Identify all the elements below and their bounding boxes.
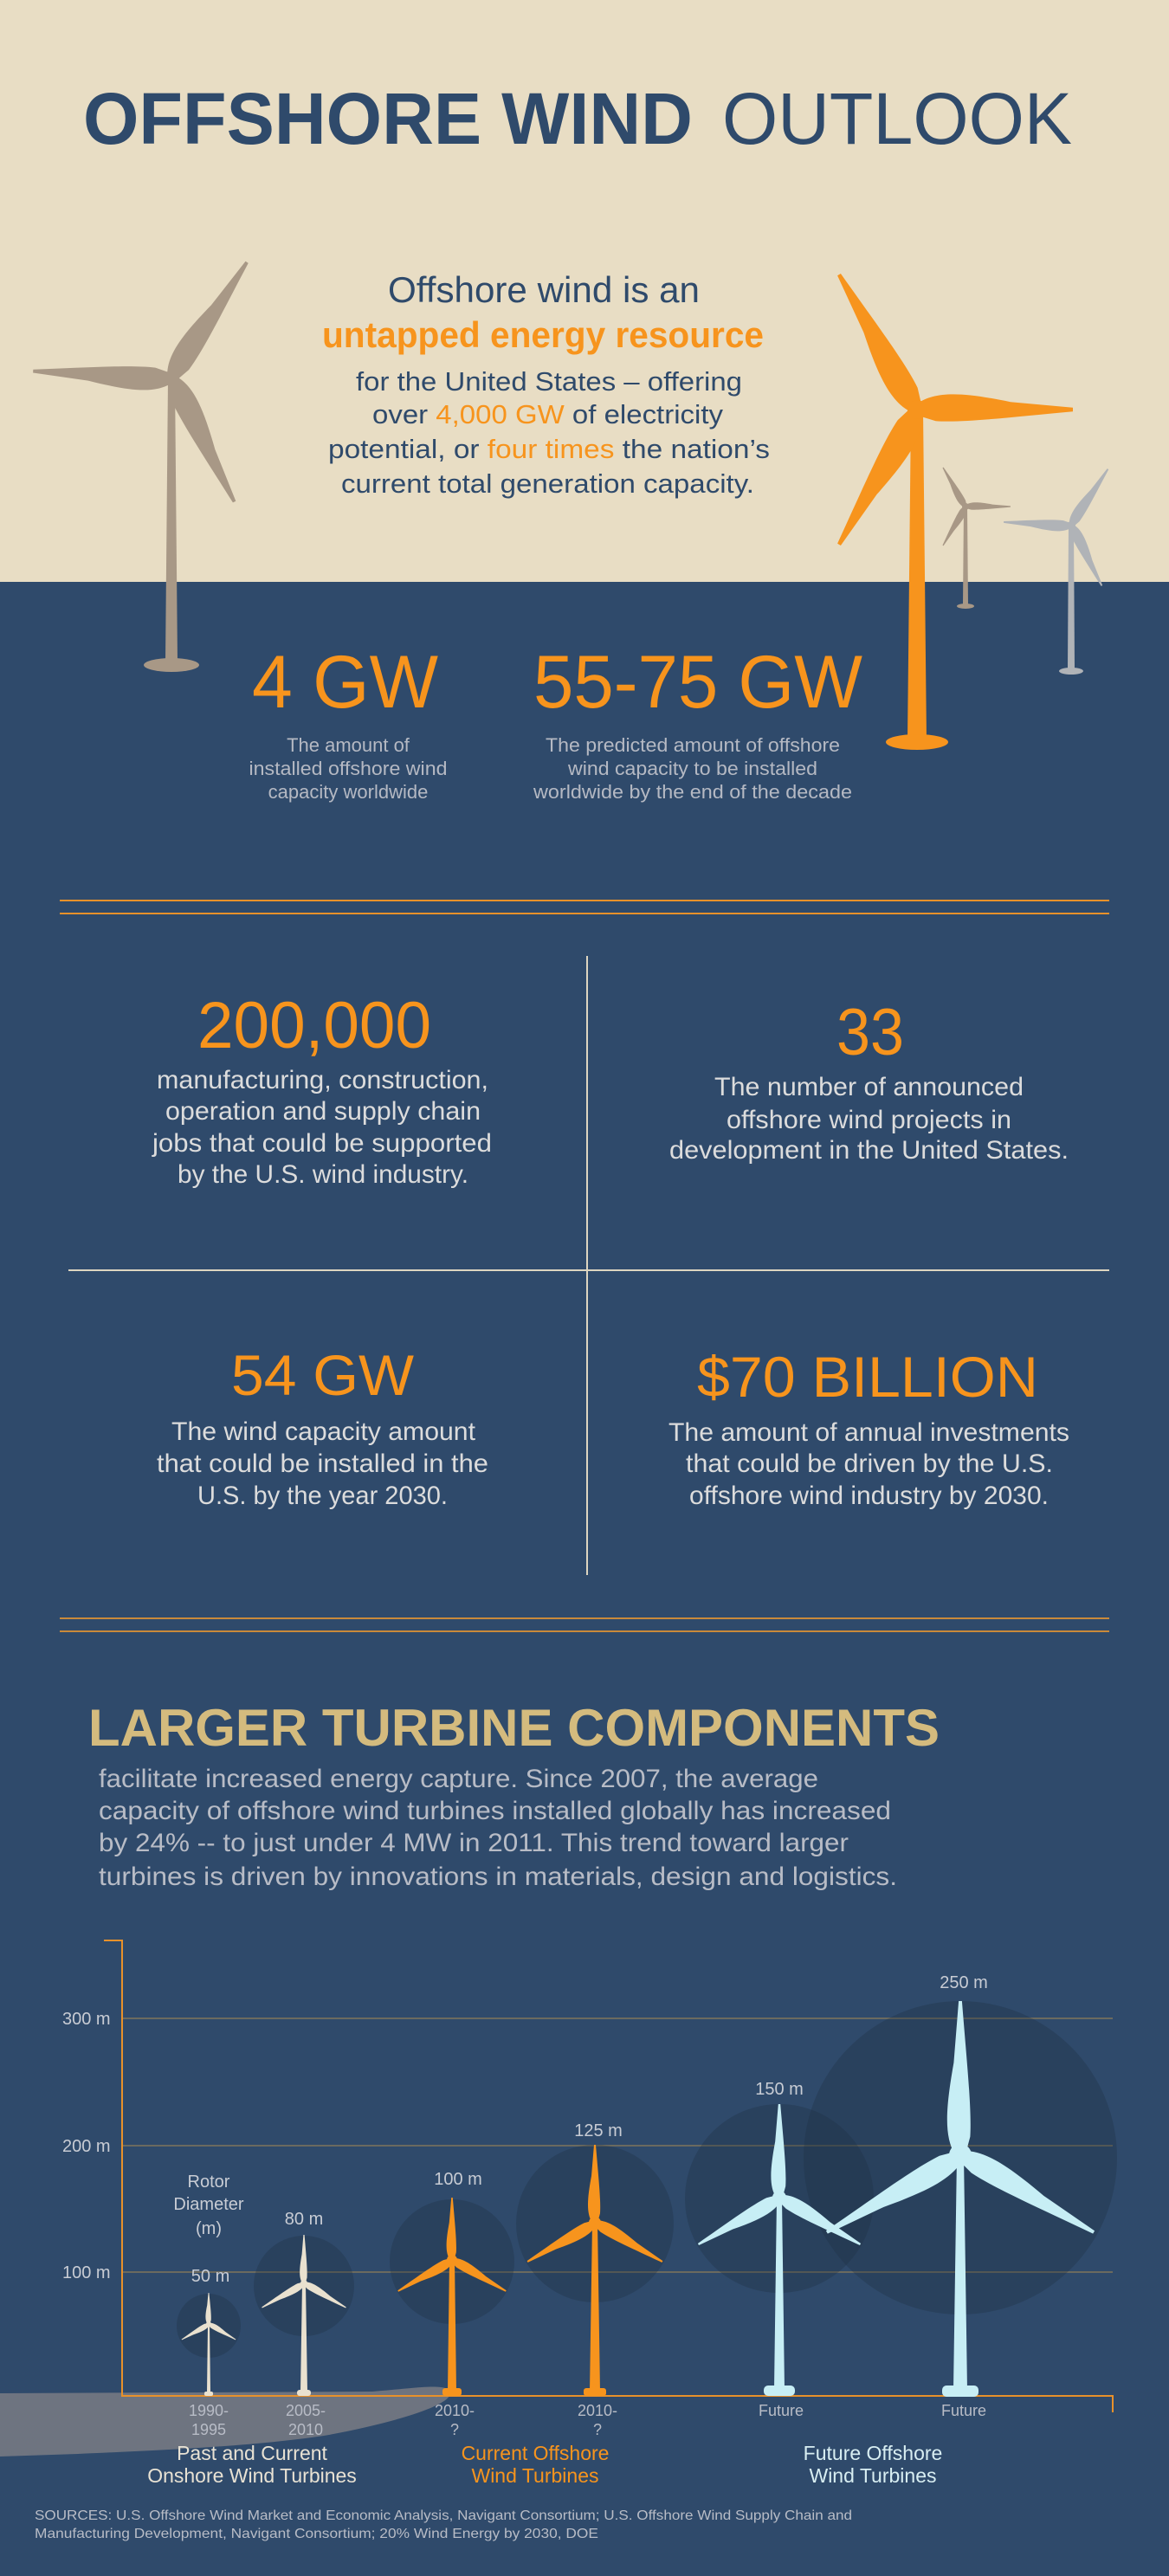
- year labels: Future: [941, 2402, 986, 2419]
- stat: 33 projects: The number of announced: [714, 1073, 1024, 1101]
- icon: orange turbine: [717, 203, 1086, 750]
- text block: turbine paragraph: [99, 1765, 897, 1891]
- stat: 55-75 GW: wind capacity to be installed: [567, 758, 817, 779]
- stat: 54 GW: 54 GW: [231, 1343, 415, 1407]
- stat: 4 GW: installed offshore wind: [249, 758, 447, 779]
- rotor size labels: 150 m: [755, 2080, 804, 2099]
- sources: [35, 2508, 852, 2541]
- panel: beige sky header: [0, 0, 1169, 582]
- year labels: ?: [450, 2421, 459, 2438]
- year labels: 2005-: [286, 2402, 326, 2419]
- sources: Manufacturing Development, Navigant Consortium; 20% Wind Energy by 2030, DOE: [35, 2527, 598, 2541]
- stat: 55-75 GW: The predicted amount of offshore: [546, 734, 840, 756]
- chart: rotor diameter comparison: [0, 1940, 1117, 2487]
- stat: 4 GW: 4 GW: [252, 641, 438, 724]
- stat: 200,000 jobs: operation and supply chain: [165, 1097, 481, 1126]
- stat: 33 projects: offshore wind projects in: [727, 1106, 1011, 1134]
- stat: $70 billion: offshore wind industry by 2030.: [689, 1482, 1049, 1510]
- stat: 33 projects: [669, 996, 1069, 1165]
- category labels: Current Offshore: [462, 2442, 609, 2464]
- turbine 250m future: [822, 2001, 1101, 2397]
- axis: [104, 1940, 1113, 2412]
- text block: intro: over 4,000 GW of electricity: [372, 399, 724, 429]
- rotor size labels: Rotor: [188, 2172, 230, 2192]
- turbine 150m future: [695, 2104, 864, 2396]
- stat: $70 billion: $70 BILLION: [697, 1345, 1038, 1409]
- text block: intro: for the United States – offering: [356, 366, 742, 397]
- year labels: 2010-: [578, 2402, 617, 2419]
- rotor size labels: Diameter: [173, 2195, 244, 2214]
- category labels: Onshore Wind Turbines: [147, 2464, 357, 2487]
- turbine 50m onshore: [180, 2293, 237, 2396]
- year labels: 2010: [288, 2421, 323, 2438]
- rotor size labels: [173, 1973, 988, 2286]
- stat: 200,000 jobs: jobs that could be supported: [152, 1129, 492, 1158]
- stat: 200,000 jobs: 200,000: [197, 989, 431, 1062]
- stat: 55-75 GW: worldwide by the end of the decade: [533, 781, 852, 803]
- stat: 200,000 jobs: manufacturing, construction,: [157, 1066, 488, 1094]
- year labels: Future: [759, 2402, 804, 2419]
- title: OUTLOOK: [722, 78, 1072, 159]
- stat: 200,000 jobs: [152, 989, 492, 1189]
- category labels: Wind Turbines: [809, 2464, 937, 2487]
- title: OFFSHORE WIND: [83, 78, 693, 159]
- category labels: [147, 2442, 942, 2487]
- rotor size labels: 50 m: [191, 2267, 229, 2286]
- stat: 4 GW: The amount of: [287, 734, 410, 756]
- stat: 200,000 jobs: by the U.S. wind industry.: [178, 1160, 468, 1189]
- axis labels: 100 m: [62, 2263, 111, 2282]
- stat: 4 GW: capacity worldwide: [268, 781, 428, 803]
- category labels: Wind Turbines: [471, 2464, 599, 2487]
- category labels: Past and Current: [177, 2442, 328, 2464]
- year labels: ?: [593, 2421, 602, 2438]
- stat: 54 GW: U.S. by the year 2030.: [197, 1482, 448, 1510]
- stat: 33 projects: development in the United States.: [669, 1136, 1069, 1165]
- category labels: Future Offshore: [804, 2442, 942, 2464]
- text block: intro: Offshore wind is an: [388, 269, 700, 310]
- year labels: 1990-: [189, 2402, 229, 2419]
- stat: 33 projects: 33: [836, 996, 904, 1069]
- turbine 80m onshore: [261, 2235, 348, 2396]
- axis labels: 200 m: [62, 2137, 111, 2156]
- axis labels: 300 m: [62, 2010, 111, 2029]
- axis labels: [62, 2010, 111, 2282]
- rotor size labels: 80 m: [285, 2210, 323, 2229]
- text block: intro: current total generation capacity.: [341, 468, 754, 499]
- icon: small tan turbine: [907, 447, 1014, 609]
- stat: $70 billion: [668, 1345, 1069, 1510]
- turbine 100m offshore: [396, 2198, 509, 2396]
- stat: 55-75 GW: 55-75 GW: [533, 641, 862, 724]
- heading: larger turbine components: LARGER TURBINE COMPONENTS: [88, 1699, 940, 1757]
- rotor circles: [177, 2001, 1117, 2358]
- sources: SOURCES: U.S. Offshore Wind Market and Economic Analysis, Navigant Consortium; U.S. Offshore Wind Supply Chain and: [35, 2508, 852, 2523]
- year labels: 2010-: [435, 2402, 475, 2419]
- text block: intro: potential, or four times the nation’s: [328, 434, 770, 464]
- text block: turbine paragraph: capacity of offshore wind turbines installed globally has increased: [99, 1797, 891, 1825]
- stat: $70 billion: The amount of annual investments: [668, 1418, 1069, 1447]
- land silhouette: [0, 2387, 450, 2457]
- stat: 4 GW: [249, 641, 447, 803]
- icon: tan turbine left: [23, 194, 353, 672]
- text block: turbine paragraph: facilitate increased energy capture. Since 2007, the average: [99, 1765, 818, 1793]
- text block: intro: untapped energy resource: [322, 314, 764, 355]
- title: [83, 78, 1072, 159]
- text block: intro: [322, 269, 770, 499]
- icon: grey turbine: [998, 436, 1159, 675]
- turbine 125m offshore: [525, 2145, 666, 2396]
- stat: 55-75 GW: [533, 641, 862, 803]
- rotor size labels: (m): [196, 2219, 222, 2238]
- stat: 54 GW: that could be installed in the: [157, 1449, 488, 1478]
- year labels: [189, 2402, 986, 2438]
- stat: 54 GW: The wind capacity amount: [171, 1417, 476, 1446]
- year labels: 1995: [191, 2421, 226, 2438]
- stat: $70 billion: that could be driven by the U.S.: [686, 1449, 1053, 1478]
- rotor size labels: 100 m: [434, 2170, 482, 2189]
- stat: 54 GW: [157, 1343, 488, 1510]
- rotor size labels: 250 m: [940, 1973, 988, 1992]
- rotor size labels: 125 m: [574, 2121, 623, 2140]
- text block: turbine paragraph: turbines is driven by innovations in materials, design and logistics.: [99, 1863, 897, 1891]
- text block: turbine paragraph: by 24% -- to just under 4 MW in 2011. This trend toward larger: [99, 1829, 849, 1857]
